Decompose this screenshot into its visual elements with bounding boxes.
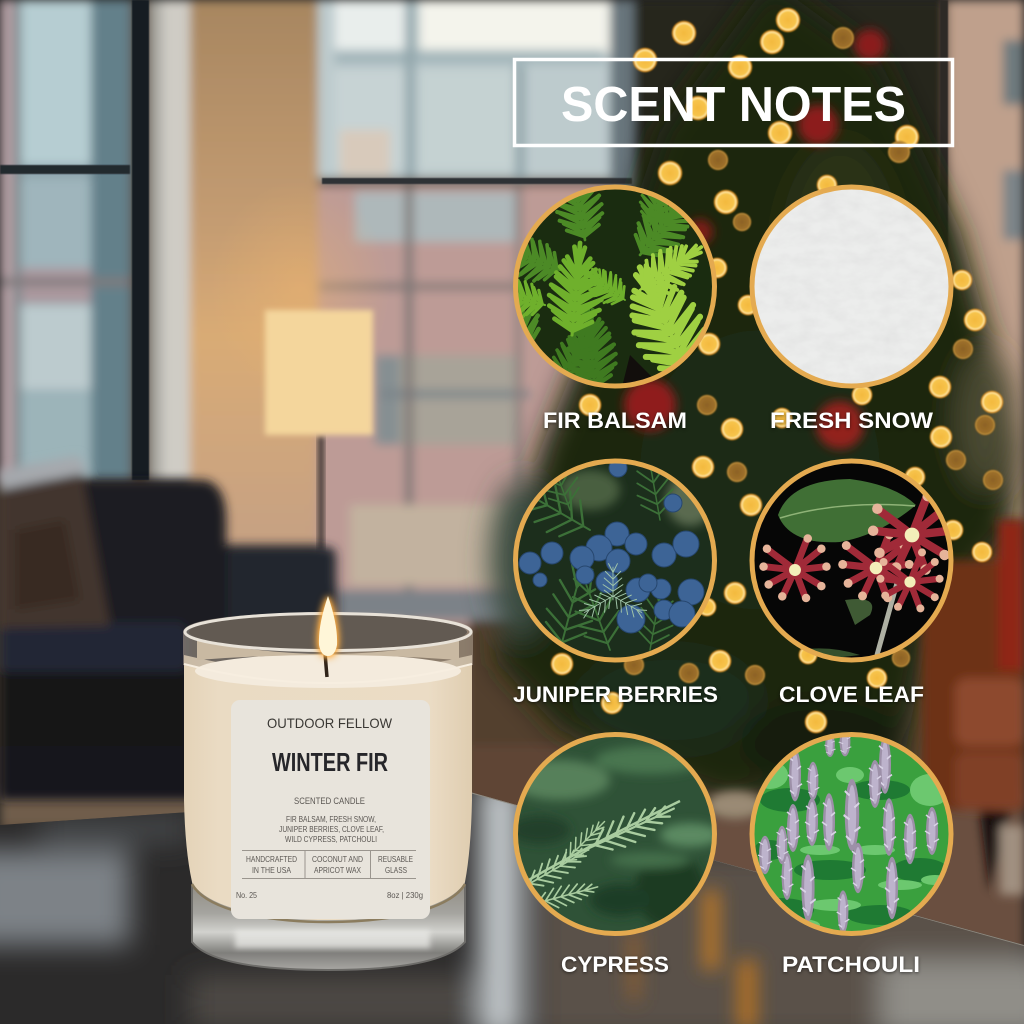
sofa and pillow <box>0 456 337 800</box>
ingredient list: WILD CYPRESS, PATCHOULI <box>285 835 377 844</box>
wax body <box>184 655 472 920</box>
feature cells: IN THE USA <box>252 866 292 875</box>
window frames <box>0 0 948 500</box>
note: juniper berries <box>513 458 718 706</box>
product type: SCENTED CANDLE <box>294 796 365 806</box>
label: cypress: CYPRESS <box>561 952 669 977</box>
feature cells: HANDCRAFTED <box>246 855 297 864</box>
glass base <box>192 875 465 970</box>
christmas tree <box>490 0 1020 819</box>
batch and weight <box>236 891 423 900</box>
label: fir balsam: FIR BALSAM <box>543 408 687 433</box>
red ornaments and chair <box>624 29 1024 895</box>
label: fresh snow: FRESH SNOW <box>770 408 933 433</box>
glass rim and upper wall <box>183 612 473 688</box>
label: patchouli: PATCHOULI <box>782 952 920 977</box>
note: patchouli <box>745 728 960 977</box>
title box: SCENT NOTES <box>561 78 906 132</box>
ingredient list: JUNIPER BERRIES, CLOVE LEAF, <box>279 825 384 834</box>
product name: WINTER FIR <box>272 747 388 777</box>
note: clove leaf <box>745 455 960 707</box>
note: cypress <box>510 730 720 977</box>
feature cells: GLASS <box>385 866 407 875</box>
lamp <box>210 180 390 551</box>
feature cells: REUSABLE <box>378 855 413 864</box>
brand: OUTDOOR FELLOW <box>267 715 393 731</box>
batch and weight: No. 25 <box>236 891 257 900</box>
candle label <box>231 700 430 919</box>
title box <box>514 60 952 146</box>
label: clove leaf: CLOVE LEAF <box>779 682 924 707</box>
note: fir balsam <box>513 184 717 430</box>
feature cells: APRICOT WAX <box>314 866 362 875</box>
note: fresh snow <box>752 187 951 433</box>
feature cells: COCONUT AND <box>312 855 363 864</box>
bokeh string lights <box>550 7 1004 734</box>
batch and weight: 8oz | 230g <box>387 891 423 900</box>
ingredient list: FIR BALSAM, FRESH SNOW, <box>286 815 376 824</box>
label: juniper berries: JUNIPER BERRIES <box>513 682 718 707</box>
ingredient list <box>279 815 384 844</box>
feature cells <box>246 855 413 875</box>
wick <box>325 652 327 677</box>
flame <box>319 596 337 656</box>
candle <box>183 596 473 970</box>
table <box>0 780 1024 1024</box>
